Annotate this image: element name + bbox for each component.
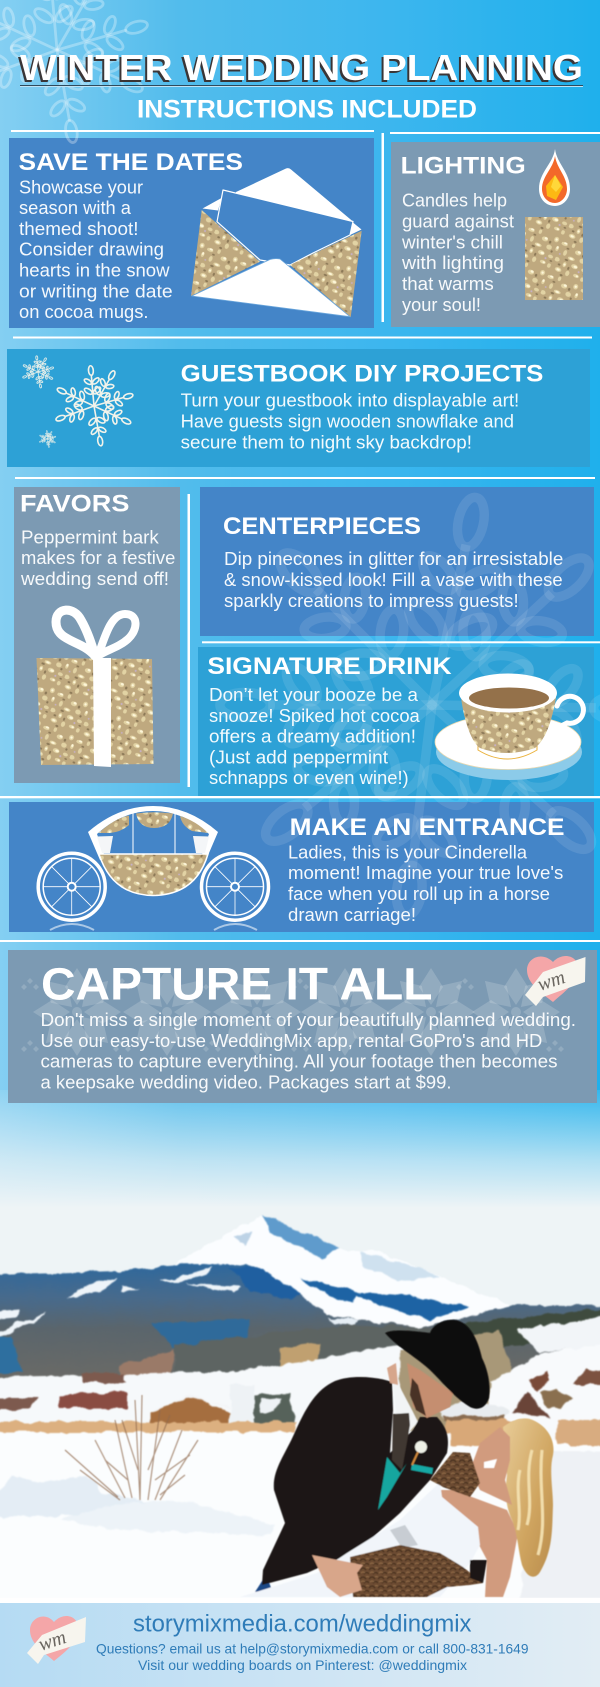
panel: capture it all background [8, 950, 597, 1103]
save the dates text: Showcase your [19, 176, 143, 197]
groom and bride [240, 1320, 553, 1597]
capture it all text [40, 958, 576, 1092]
centerpieces text [223, 513, 563, 611]
save the dates text: themed shoot! [19, 218, 138, 239]
lighting text: your soul! [402, 294, 481, 315]
guestbook text: Turn your guestbook into displayable art! [181, 390, 519, 411]
lighting text: Candles help [402, 190, 507, 211]
save the dates text: on cocoa mugs. [19, 301, 148, 322]
make an entrance text: MAKE AN ENTRANCE [290, 814, 564, 841]
footer text: Visit our wedding boards on Pinterest: @weddingmix [138, 1657, 467, 1673]
make an entrance text [288, 814, 564, 925]
capture it all text: Use our easy-to-use WeddingMix app, rental GoPro's and HD [40, 1030, 542, 1051]
lighting text: with lighting [401, 252, 504, 273]
footer text [96, 1611, 529, 1673]
footer text: storymixmedia.com/weddingmix [133, 1611, 472, 1638]
save the dates text: season with a [19, 197, 132, 218]
panel: save the dates background [9, 138, 374, 328]
capture it all text: CAPTURE IT ALL [41, 958, 433, 1009]
lighting text: guard against [402, 210, 514, 232]
lighting text: winter's chill [401, 231, 503, 252]
icon: teacup and saucer [435, 674, 583, 780]
guestbook text: GUESTBOOK DIY PROJECTS [181, 361, 543, 388]
signature drink text: SIGNATURE DRINK [207, 653, 452, 680]
favors text: FAVORS [20, 491, 129, 518]
signature drink text: offers a dreamy addition! [209, 726, 416, 747]
capture it all text: a keepsake wedding video. Packages start at $99. [40, 1071, 452, 1092]
lighting text: LIGHTING [401, 152, 526, 179]
favors text [20, 491, 175, 589]
save the dates text: hearts in the snow [19, 260, 170, 280]
subtitle: INSTRUCTIONS INCLUDED [137, 96, 477, 124]
save the dates text: or writing the date [19, 280, 173, 301]
capture it all text: Don't miss a single moment of your beautifully planned wedding. [40, 1009, 576, 1030]
signature drink text: snooze! Spiked hot cocoa [209, 705, 420, 726]
capture it all text: cameras to capture everything. All your footage then becomes [40, 1051, 558, 1072]
photo: mountain and couple [0, 1215, 600, 1622]
title: WINTER WEDDING PLANNING [20, 47, 583, 88]
white rule lines [0, 130, 600, 942]
icon: snowflakes [22, 356, 135, 448]
signature drink text [207, 653, 452, 788]
save the dates text: Consider drawing [19, 239, 164, 260]
icon: carriage [38, 806, 268, 930]
make an entrance text: Ladies, this is your Cinderella [288, 841, 528, 862]
guestbook text [181, 361, 543, 452]
save the dates text [18, 149, 243, 322]
panel: guestbook background [7, 349, 590, 467]
centerpieces text: sparkly creations to impress guests! [224, 590, 519, 611]
centerpieces text: CENTERPIECES [223, 513, 421, 540]
lighting text [401, 152, 526, 315]
icon: wm heart logo [525, 956, 586, 1006]
signature drink text: (Just add peppermint [209, 746, 388, 767]
footer bar [0, 1603, 600, 1687]
background snowflakes [0, 0, 600, 921]
icon: flame [539, 149, 570, 206]
favors text: makes for a festive [21, 547, 175, 568]
icon: wm heart logo: wm [535, 966, 568, 996]
footer text: Questions? email us at help@storymixmedia.com or call 800-831-1649 [96, 1640, 529, 1656]
guestbook text: secure them to night sky backdrop! [181, 431, 472, 452]
favors text: Peppermint bark [21, 526, 160, 547]
make an entrance text: face when you roll up in a horse [288, 883, 550, 904]
footer logo [27, 1616, 86, 1664]
icon: gift box [36, 610, 154, 767]
lighting text: that warms [402, 273, 494, 294]
panel: favors background [14, 487, 180, 783]
icon: envelope [191, 168, 362, 317]
make an entrance text: drawn carriage! [288, 904, 416, 925]
make an entrance text: moment! Imagine your true love's [288, 862, 563, 883]
panel: centerpieces background [200, 487, 594, 636]
footer logo: wm [36, 1626, 69, 1656]
panel: lighting background [391, 142, 600, 327]
centerpieces text: Dip pinecones in glitter for an irresistable [224, 548, 563, 569]
guestbook text: Have guests sign wooden snowflake and [181, 410, 514, 432]
save the dates text: SAVE THE DATES [18, 149, 243, 176]
favors text: wedding send off! [20, 568, 169, 589]
panel: signature drink background [198, 647, 594, 796]
bare bush [65, 1395, 198, 1500]
centerpieces text: & snow-kissed look! Fill a vase with these [224, 569, 563, 590]
glitter square [525, 217, 583, 300]
capture panel snowflake row [21, 968, 564, 1056]
photo background landscape [0, 1215, 600, 1622]
panel: make an entrance background [9, 802, 594, 932]
signature drink text: Don’t let your booze be a [209, 684, 419, 705]
signature drink text: schnapps or even wine!) [209, 767, 409, 788]
